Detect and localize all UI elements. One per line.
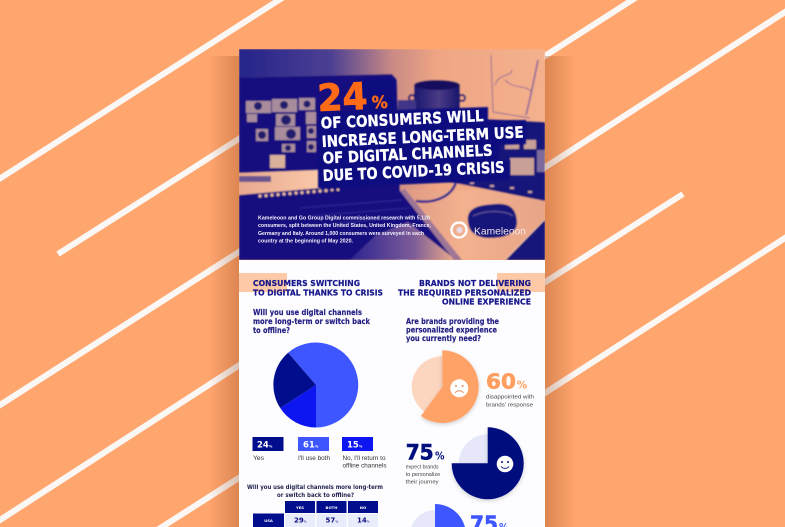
table xyxy=(253,501,378,527)
headline: OF DIGITAL CHANNELS xyxy=(322,142,493,167)
question: you currently need? xyxy=(406,334,481,343)
research description: Germany and Italy. Around 1,000 consumers were surveyed in each xyxy=(258,231,424,237)
heading: consumers switching: TO DIGITAL THANKS TO CRISIS xyxy=(253,288,383,298)
desk xyxy=(410,191,544,258)
icon: sad face xyxy=(450,379,468,397)
dock icons xyxy=(258,188,339,198)
table: USA xyxy=(264,518,273,523)
heading accent xyxy=(239,273,287,292)
page shadow xyxy=(209,56,575,527)
title block background xyxy=(318,78,526,188)
stat: 60%: % xyxy=(517,378,527,392)
legend: both xyxy=(298,437,330,462)
stat: 60% xyxy=(486,370,534,408)
screen bottom band xyxy=(239,170,320,195)
heading: brands not delivering: BRANDS NOT DELIVERING xyxy=(419,278,531,288)
heading accent xyxy=(497,273,545,292)
question: Will you use digital channels xyxy=(253,308,362,317)
headline: DUE TO COVID-19 CRISIS xyxy=(322,158,505,185)
stat: 60%: brands' response xyxy=(486,402,533,408)
legend: yes: 24% xyxy=(257,440,273,450)
table: 57% xyxy=(326,516,338,524)
cable xyxy=(416,182,456,202)
table: 14% xyxy=(357,516,370,524)
heading: brands not delivering xyxy=(398,278,531,306)
whiteboard sketch on wall xyxy=(491,55,538,118)
question xyxy=(253,308,371,335)
research description: country at the beginning of May 2020. xyxy=(258,238,353,244)
question: personalized experience xyxy=(406,326,497,334)
second monitor xyxy=(450,117,545,201)
stat: 75% expect: % xyxy=(435,450,444,462)
logo: Kameleoon xyxy=(452,222,526,238)
pie chart xyxy=(273,343,358,428)
stat: 75% expect: their journey xyxy=(406,480,439,486)
legend: both: I'll use both xyxy=(298,456,330,462)
legend: yes: Yes xyxy=(253,456,264,462)
headline: INCREASE LONG-TERM USE xyxy=(321,124,524,151)
table: NO xyxy=(360,505,367,510)
table: BOTH xyxy=(326,505,337,510)
legend: both: 61% xyxy=(303,440,319,450)
video call tiles xyxy=(246,98,316,168)
legend: yes xyxy=(252,437,284,462)
panel: header photo xyxy=(239,49,545,260)
headline figure: 24 xyxy=(317,75,368,120)
legend: no xyxy=(342,437,386,470)
heading: brands not delivering: ONLINE EXPERIENCE xyxy=(442,296,531,306)
panel: brands not delivering xyxy=(398,273,545,527)
chart: 60% disappointed xyxy=(412,350,479,423)
trackpad xyxy=(350,222,456,260)
table heading xyxy=(247,483,383,499)
heading: brands not delivering: THE REQUIRED PERSONALIZED xyxy=(398,288,531,298)
legend: no: No, I'll return to xyxy=(342,456,386,462)
stat: 75% expect: expect brands xyxy=(406,464,439,470)
stat: 75% expect: 75 xyxy=(406,440,434,464)
table heading: or switch back to offline? xyxy=(277,491,354,499)
legend: no: 15% xyxy=(347,440,363,450)
question xyxy=(406,317,499,343)
icon: smiling face xyxy=(497,456,513,472)
phone xyxy=(505,219,545,260)
table: 29% xyxy=(294,516,307,524)
heading: consumers switching: CONSUMERS SWITCHING xyxy=(253,278,360,288)
question: more long-term or switch back xyxy=(253,317,371,326)
panel: consumers switching xyxy=(239,273,386,527)
stat: 75% expect: to personalize xyxy=(406,472,440,478)
stat: 60%: 60 xyxy=(486,370,516,394)
research description: consumers, split between the United States, United Kingdom, France, xyxy=(258,223,431,229)
heading: consumers switching xyxy=(253,278,383,298)
research description xyxy=(258,216,431,244)
headline: OF CONSUMERS WILL xyxy=(320,107,484,132)
question: Are brands providing the xyxy=(406,317,499,326)
logo: Kameleoon: Kameleoon xyxy=(474,226,526,238)
laptop screen xyxy=(239,74,400,206)
table: YES xyxy=(295,505,304,510)
table heading: Will you use digital channels more long-term xyxy=(247,483,383,491)
headline figure xyxy=(319,82,388,112)
panel: white page body xyxy=(239,260,545,527)
stat: 75% expect xyxy=(406,440,444,486)
watch xyxy=(468,204,517,238)
chart: 75% expect xyxy=(452,427,524,499)
stat: 60%: disappointed with xyxy=(486,394,534,400)
chart: third 75% xyxy=(411,504,465,527)
legend: no: offline channels xyxy=(342,464,386,470)
research description: Kameleoon and Go Group Digital commissioned research with 5,128 xyxy=(258,216,431,222)
question: to offline? xyxy=(253,326,290,335)
lens cup xyxy=(396,79,467,111)
headline figure: % xyxy=(371,93,388,113)
laptop base and keyboard xyxy=(239,191,458,260)
headline xyxy=(320,107,524,185)
